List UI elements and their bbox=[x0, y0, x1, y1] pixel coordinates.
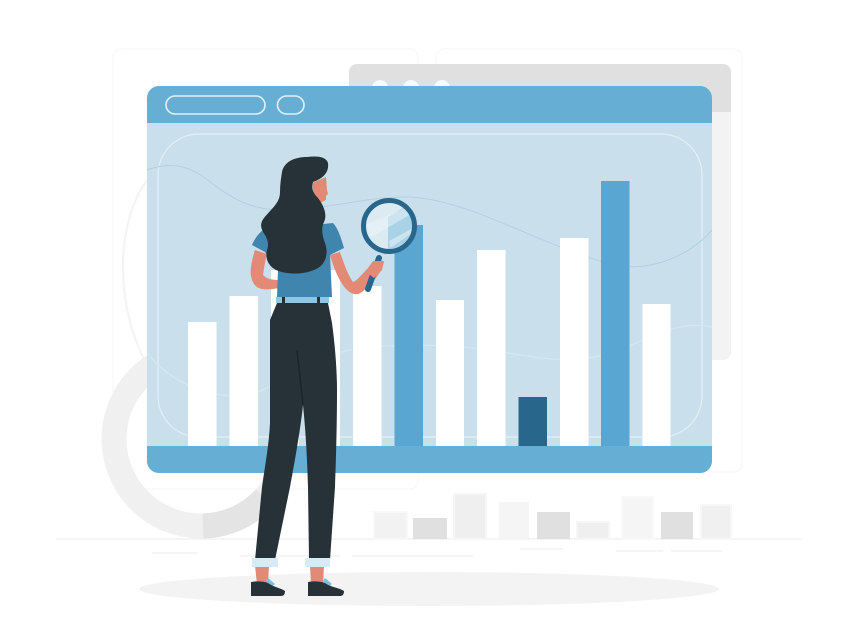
right cuff bbox=[305, 558, 330, 567]
main browser window bbox=[147, 86, 712, 473]
background faint arc bbox=[123, 180, 147, 365]
address bar bbox=[166, 96, 265, 114]
background grey window bbox=[349, 64, 731, 360]
handle bbox=[368, 258, 379, 289]
window body bbox=[147, 86, 712, 473]
face bbox=[312, 177, 328, 203]
trend lines bbox=[147, 165, 712, 396]
hair bbox=[261, 157, 328, 274]
lens glare bbox=[367, 208, 413, 248]
window footer bbox=[147, 446, 712, 473]
belt bbox=[276, 297, 329, 303]
front arm bbox=[330, 252, 384, 294]
left cuff bbox=[252, 558, 278, 567]
bar chart bbox=[188, 181, 670, 446]
lens bbox=[364, 201, 414, 251]
background donut chart bbox=[114, 352, 288, 526]
ground line and dashes bbox=[56, 539, 802, 556]
left shoe bbox=[251, 578, 285, 596]
right shoe bbox=[308, 578, 344, 596]
background small bars bbox=[374, 494, 731, 539]
magnifying glass bbox=[364, 200, 414, 289]
trouser crease bbox=[297, 350, 303, 405]
ground shadow bbox=[139, 572, 719, 606]
inner frame bbox=[158, 134, 702, 437]
person bbox=[251, 157, 384, 596]
back arm bbox=[251, 250, 279, 289]
right ankle bbox=[310, 566, 324, 584]
lens rim bbox=[364, 200, 414, 252]
hand over handle bbox=[366, 261, 384, 278]
window header bbox=[147, 86, 712, 123]
blouse bbox=[252, 223, 344, 297]
background window outlines bbox=[113, 49, 742, 489]
trousers bbox=[255, 303, 337, 560]
magnified bar bbox=[388, 207, 414, 251]
address button bbox=[278, 96, 304, 114]
left ankle bbox=[255, 566, 269, 584]
